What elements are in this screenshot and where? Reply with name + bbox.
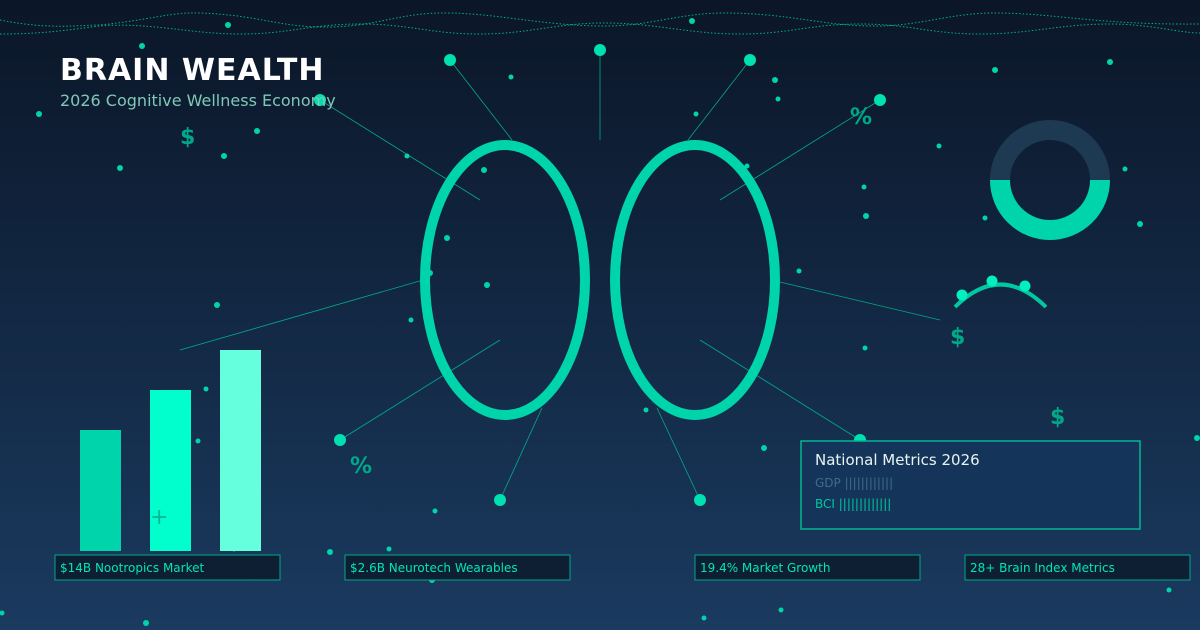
connector lines xyxy=(180,50,940,500)
bar chart xyxy=(80,350,261,551)
stat labels: $2.6B Neurotech Wearables xyxy=(350,561,518,575)
brain rings xyxy=(425,145,775,415)
stat labels: 19.4% Market Growth xyxy=(700,561,830,575)
stat labels xyxy=(55,555,1190,580)
symbol: dollar signs and percents: $ xyxy=(1050,405,1065,430)
symbol: dollar signs and percents: $ xyxy=(180,125,195,150)
national metrics panel xyxy=(801,441,1140,529)
donut chart xyxy=(1000,130,1100,230)
arc gauge xyxy=(955,276,1046,307)
symbol: dollar signs and percents: $ xyxy=(950,325,965,350)
stat labels: $14B Nootropics Market xyxy=(60,561,204,575)
national metrics panel: GDP |||||||||||| xyxy=(815,476,893,490)
national metrics panel: National Metrics 2026 xyxy=(815,451,980,469)
national metrics panel: BCI ||||||||||||| xyxy=(815,497,891,511)
connector nodes xyxy=(314,44,886,506)
symbol: dollar signs and percents: % xyxy=(350,454,372,479)
symbol: dollar signs and percents xyxy=(180,105,1065,479)
bar chart: + xyxy=(150,505,168,530)
title: BRAIN WEALTH xyxy=(60,53,324,88)
subtitle: 2026 Cognitive Wellness Economy xyxy=(60,91,336,110)
stat labels: 28+ Brain Index Metrics xyxy=(970,561,1115,575)
symbol: dollar signs and percents: % xyxy=(850,105,872,130)
